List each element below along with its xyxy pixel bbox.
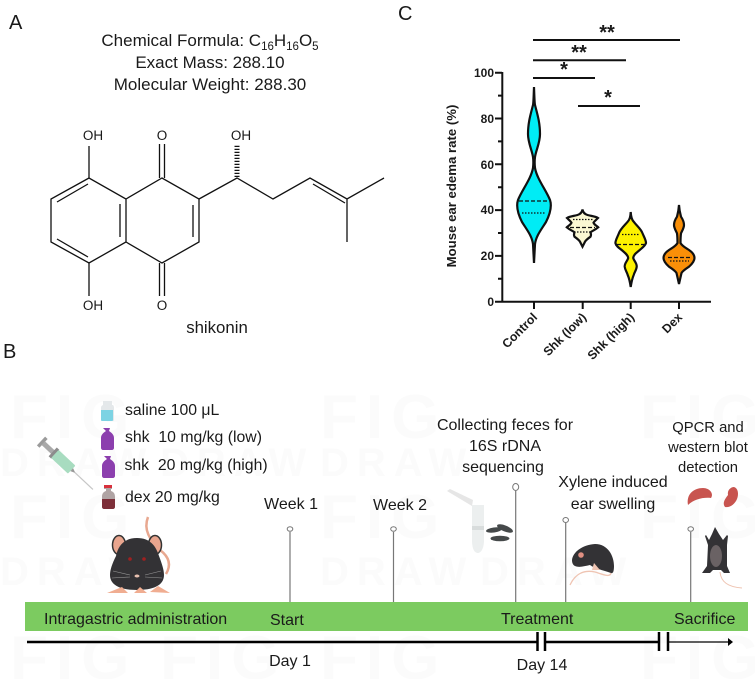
timeline pins (287, 484, 694, 602)
shikonin structure: O (157, 128, 167, 143)
bar labels: Start (270, 612, 304, 629)
timeline labels: Week 2 (373, 497, 427, 514)
day labels: Day 14 (517, 657, 567, 674)
violin: Control (517, 87, 551, 263)
timeline labels: ear swelling (571, 496, 655, 513)
text: FIG (320, 483, 447, 552)
treatment list (124, 402, 268, 506)
time axis with breaks and arrow (27, 632, 733, 651)
timeline labels: sequencing (462, 459, 544, 476)
violin: Shk low (567, 210, 598, 247)
timeline labels: detection (678, 460, 738, 476)
axes (495, 72, 711, 309)
significance brackets: ** (571, 42, 587, 64)
axis tick labels: 80 (481, 112, 494, 126)
significance brackets (533, 22, 680, 109)
day labels (269, 653, 567, 674)
axis tick labels: 40 (481, 203, 494, 217)
panel A: chemical data text: O (299, 31, 312, 50)
panel C: violin chart (444, 22, 711, 363)
significance brackets: * (604, 87, 612, 109)
violin: Dex (664, 205, 694, 284)
icon: tube and feces (447, 489, 514, 553)
icon: side-view mouse (570, 544, 614, 585)
violin: Shk high (615, 212, 646, 287)
treatment list: saline 100 μL (125, 402, 220, 419)
panel label A: A (9, 12, 23, 34)
category labels: Shk (low) (541, 310, 589, 359)
axis tick labels: 60 (481, 158, 494, 172)
bar labels: Sacrifice (674, 611, 735, 628)
shikonin structure: O (157, 298, 167, 313)
icons: organs (688, 487, 738, 507)
shikonin structure (51, 128, 384, 313)
text: DRAW (320, 550, 474, 594)
text: DRAW (160, 441, 314, 485)
text: DRAW (0, 441, 154, 485)
axis tick labels: 0 (487, 295, 494, 309)
timeline labels: 16S rDNA (469, 438, 541, 455)
panel A: chemical data text: Molecular Weight: 288.30 (114, 75, 306, 94)
treatment list: dex 20 mg/kg (125, 489, 220, 506)
category labels: Shk (high) (585, 310, 637, 363)
text: DRAW (320, 441, 474, 485)
panel A: chemical data text: Chemical Formula: C (101, 31, 261, 50)
category labels: Control (499, 310, 540, 351)
icons: vials (101, 401, 115, 509)
timeline labels: Xylene induced (558, 474, 668, 491)
text: DRAW (480, 550, 634, 594)
bar labels: Intragastric administration (44, 611, 227, 628)
timeline labels: Collecting feces for (437, 417, 574, 434)
treatment list: shk 10 mg/kg (low) (125, 429, 262, 446)
icon: mouse front view (107, 517, 170, 593)
y axis title: Mouse ear edema rate (%) (444, 105, 459, 267)
timeline labels (264, 417, 748, 514)
panel label C: C (398, 3, 412, 25)
green timeline bar (25, 602, 748, 631)
text: FIG (10, 483, 137, 552)
day labels: Day 1 (269, 653, 311, 670)
axis tick labels: 100 (474, 66, 494, 80)
panel label B: B (3, 341, 16, 363)
panel A: chemical data text: H (274, 31, 286, 50)
icon: dissected mouse (702, 527, 742, 588)
text: DRAW (0, 550, 154, 594)
bar labels: Treatment (501, 611, 574, 628)
category labels (499, 310, 685, 363)
bar labels (44, 611, 735, 629)
shikonin structure: OH (83, 128, 103, 143)
timeline labels: western blot (667, 440, 748, 456)
panel A: chemical data text: 5 (312, 41, 319, 53)
panel A: chemical data text (101, 31, 319, 94)
panel A: chemical data text: Exact Mass: 288.10 (135, 53, 285, 72)
shikonin structure: OH (83, 298, 103, 313)
shikonin structure: OH (231, 128, 251, 143)
significance brackets: * (560, 59, 568, 81)
treatment list: shk 20 mg/kg (high) (124, 457, 268, 474)
compound name: shikonin (186, 318, 248, 337)
axis tick labels: 20 (481, 249, 494, 263)
panel A: chemical data text: 16 (286, 41, 299, 53)
axis tick labels (474, 66, 494, 309)
significance brackets: ** (599, 22, 615, 44)
category labels: Dex (659, 310, 685, 336)
timeline labels: Week 1 (264, 496, 318, 513)
panel A: chemical data text: 16 (261, 41, 274, 53)
text: FIG (10, 383, 137, 452)
text: FIG (320, 383, 447, 452)
timeline labels: QPCR and (672, 420, 744, 436)
icon: syringe (37, 437, 97, 494)
